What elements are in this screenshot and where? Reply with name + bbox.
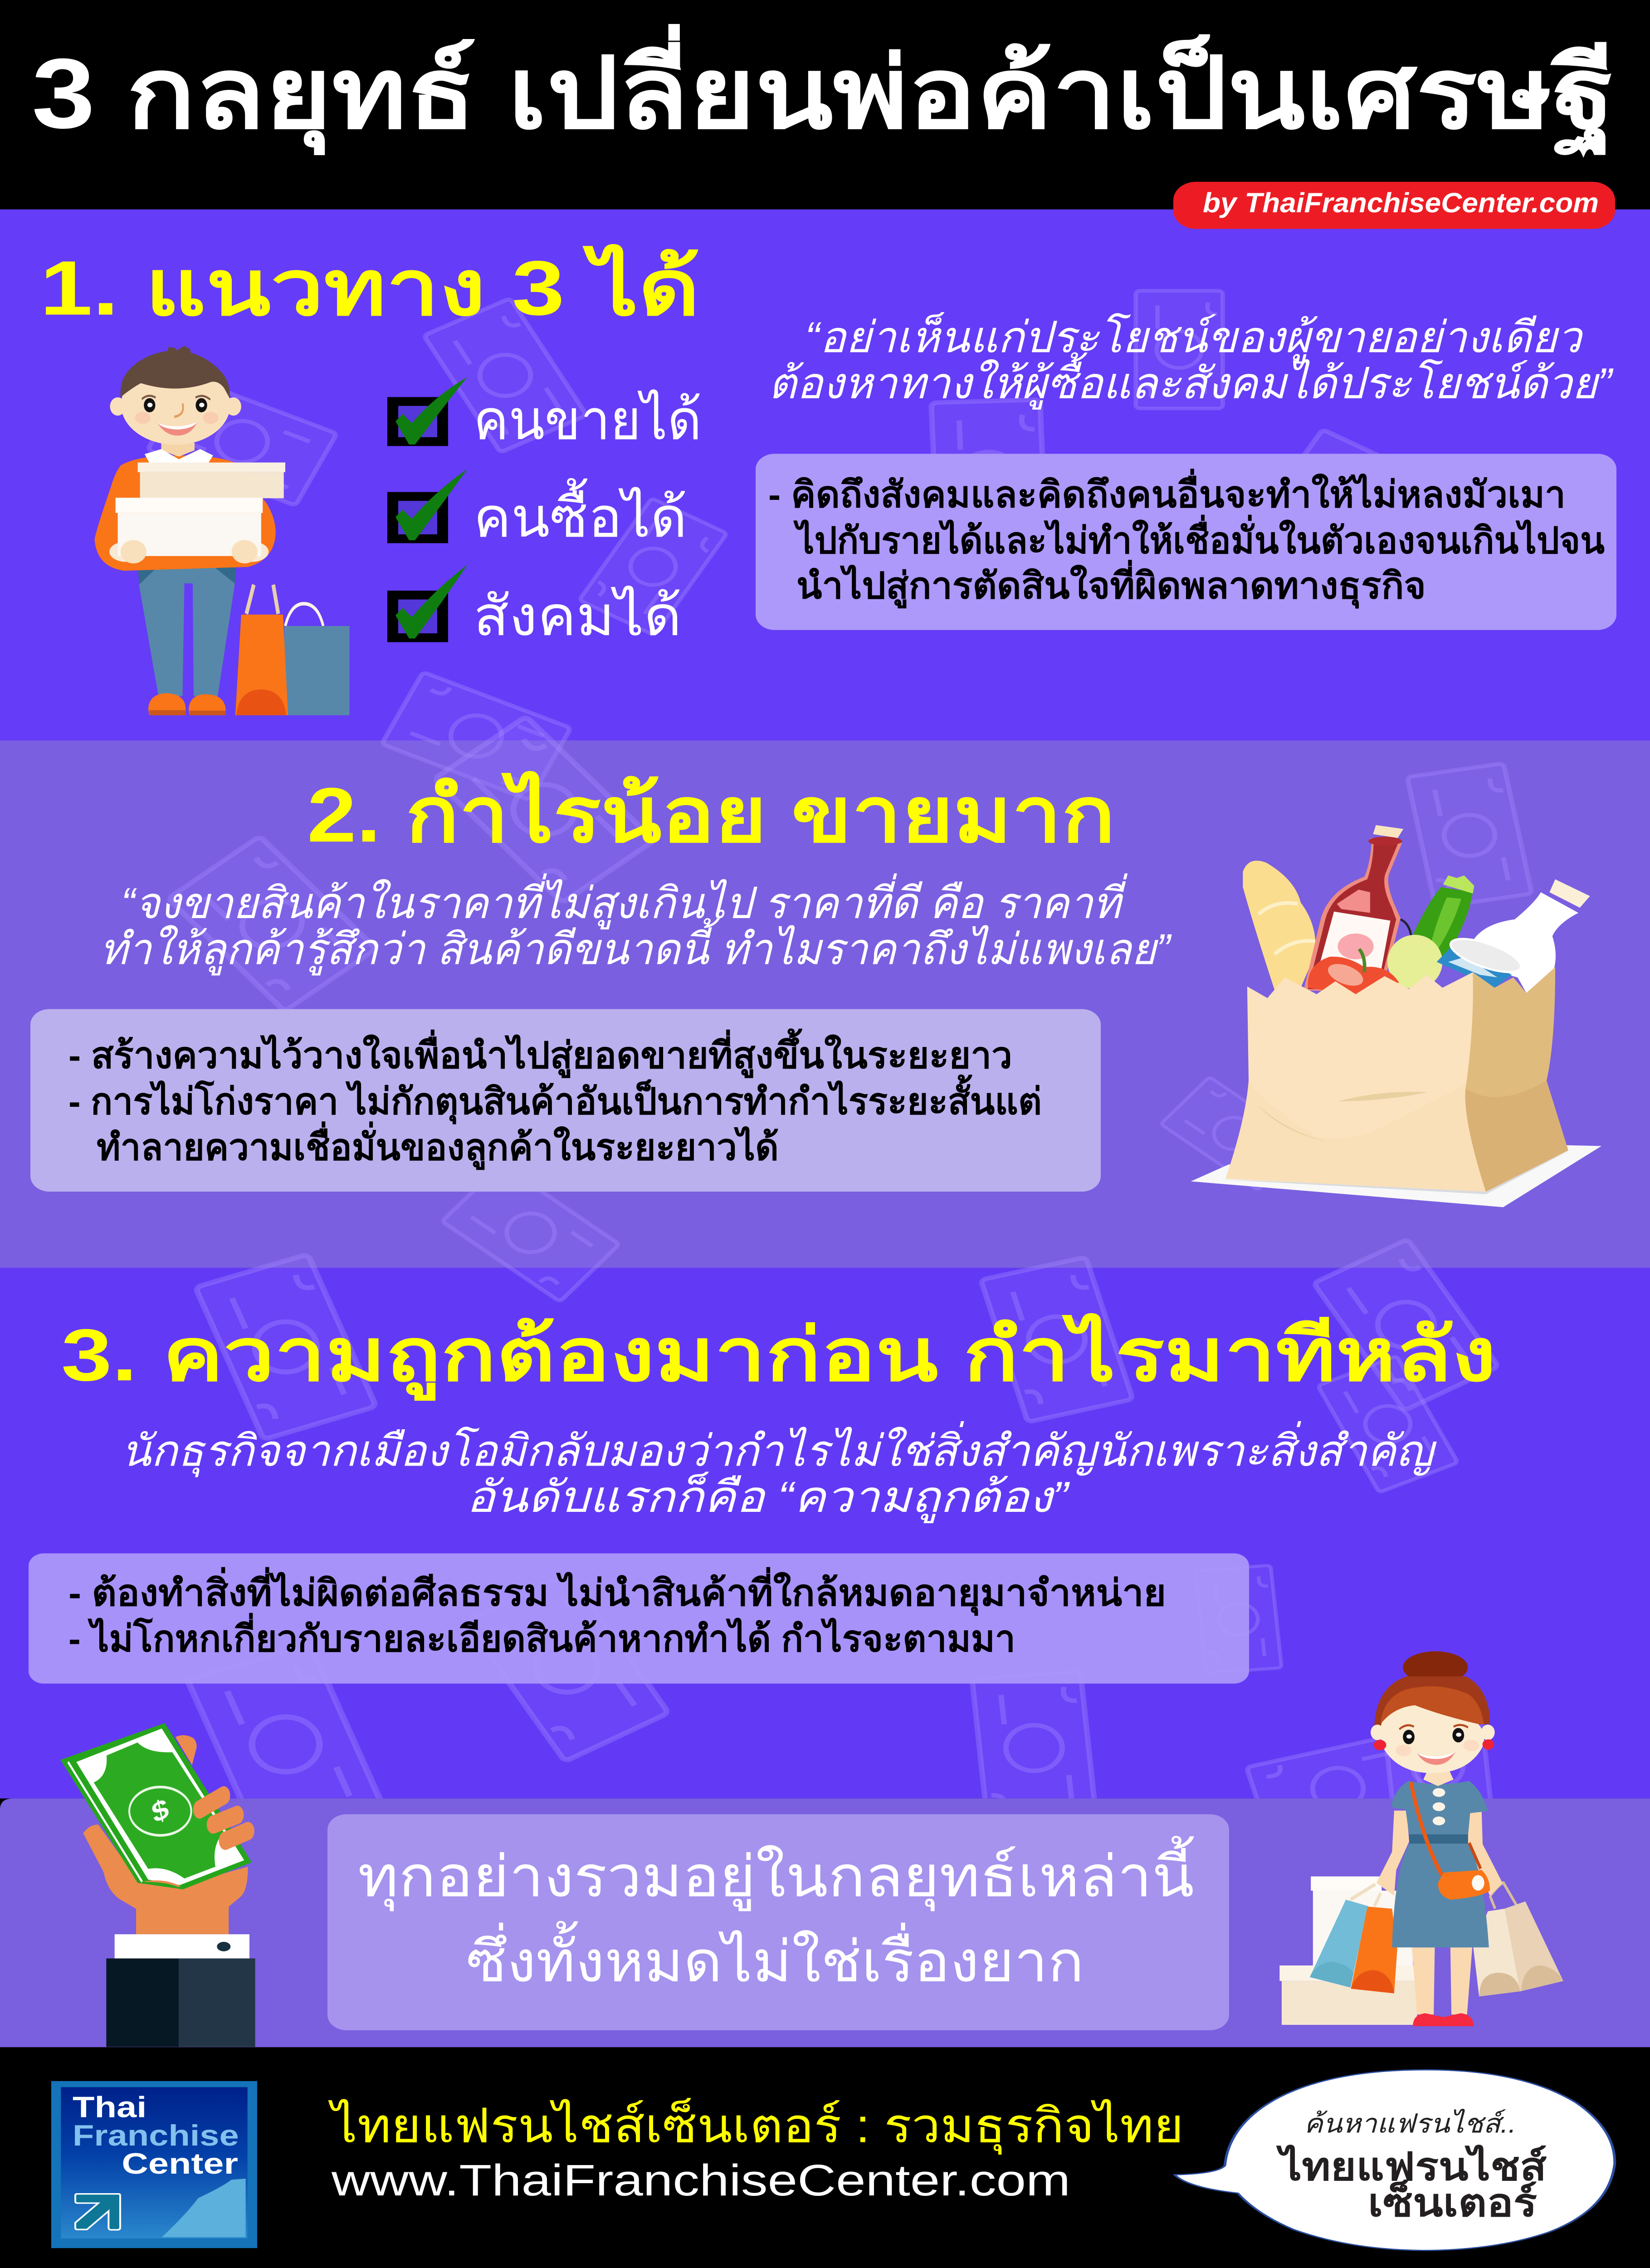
heading: section 1: 1. แนวทาง 3 ได้ bbox=[40, 244, 700, 331]
panel: closing message: ซึ่งทั้งหมดไม่ใช่เรื่องยาก bbox=[466, 1921, 1084, 1994]
heading: section 2: 2. กำไรน้อย ขายมาก bbox=[307, 771, 1115, 858]
check item 2: คนซื้อได้ bbox=[474, 478, 687, 548]
panel: section 3 notes: - ไม่โกหกเกี่ยวกับรายละเอียดสินค้าหากทำได้ กำไรจะตามมา bbox=[68, 1613, 1015, 1659]
check item 1 bbox=[393, 377, 702, 451]
header band bbox=[0, 0, 1650, 210]
section 1 background bbox=[0, 210, 1650, 741]
panel: section 2 notes: ทำลายความเชื่อมั่นของลูกค้าในระยะยาวได้ bbox=[97, 1122, 779, 1170]
panel: section 1 notes: นำไปสู่การตัดสินใจที่ผิดพลาดทางธุรกิจ bbox=[796, 560, 1426, 609]
footer brand line: ไทยแฟรนไชส์เซ็นเตอร์ : รวมธุรกิจไทย bbox=[328, 2098, 1184, 2155]
quote: section 3: อันดับแรกก็คือ “ความถูกต้อง” bbox=[466, 1471, 1070, 1524]
speech bubble: เซ็นเตอร์ bbox=[1368, 2180, 1537, 2224]
bottom band bbox=[0, 1799, 1650, 2053]
quote: section 1 bbox=[768, 312, 1614, 410]
checklist bbox=[393, 377, 702, 647]
speech bubble: ไทยแฟรนไชส์ bbox=[1276, 2145, 1547, 2189]
panel: section 3 notes: - ต้องทำสิ่งที่ไม่ผิดต่อศีลธรรม ไม่นำสินค้าที่ใกล้หมดอายุมาจำหน่าย bbox=[68, 1567, 1166, 1616]
check item 2 bbox=[393, 469, 687, 548]
illustration: hand holding money: $ bbox=[149, 1792, 171, 1829]
illustration: boy with boxes bbox=[95, 346, 350, 715]
footer brand line bbox=[328, 2098, 1184, 2205]
quote: section 2 bbox=[100, 873, 1172, 976]
logo: Thai Franchise Center: Thai bbox=[73, 2091, 146, 2124]
logo: Thai Franchise Center: Franchise bbox=[73, 2119, 239, 2152]
panel: section 1 notes bbox=[756, 454, 1616, 630]
heading: section 3: 3. ความถูกต้องมาก่อน กำไรมาทีหลัง bbox=[61, 1313, 1496, 1401]
panel: section 2 notes: - สร้างความไว้วางใจเพื่อนำไปสู่ยอดขายที่สูงขึ้นในระยะยาว bbox=[68, 1028, 1012, 1079]
illustration: hand holding money bbox=[60, 1723, 255, 2047]
byline badge bbox=[1173, 182, 1615, 229]
quote: section 3 bbox=[121, 1421, 1437, 1524]
panel: closing message: ทุกอย่างรวมอยู่ในกลยุทธ์เหล่านี้ bbox=[358, 1836, 1194, 1911]
speech bubble bbox=[1175, 2070, 1615, 2250]
speech bubble: ค้นหาแฟรนไชส์.. bbox=[1304, 2109, 1516, 2138]
quote: section 2: “จงขายสินค้าในราคาที่ไม่สูงเกินไป ราคาที่ดี คือ ราคาที่ bbox=[121, 873, 1128, 930]
section 3 background bbox=[0, 1268, 1650, 1799]
check item 3 bbox=[393, 565, 682, 647]
panel: section 3 notes bbox=[29, 1553, 1249, 1684]
panel: section 2 notes bbox=[30, 1009, 1101, 1192]
illustration: woman with shopping bags bbox=[1279, 1651, 1563, 2026]
quote: section 2: ทำให้ลูกค้ารู้สึกว่า สินค้าดีขนาดนี้ ทำไมราคาถึงไม่แพงเลย” bbox=[100, 918, 1172, 976]
check item 3: สังคมได้ bbox=[474, 585, 682, 647]
footer brand line: www.ThaiFranchiseCenter.com bbox=[331, 2156, 1070, 2205]
logo: Thai Franchise Center bbox=[51, 2081, 257, 2248]
logo: Thai Franchise Center: Center bbox=[122, 2147, 238, 2180]
illustration: grocery bag bbox=[1191, 825, 1601, 1207]
section 2 background bbox=[0, 740, 1650, 1268]
footer band bbox=[0, 2047, 1650, 2268]
check item 1: คนขายได้ bbox=[474, 389, 702, 451]
panel: closing message bbox=[327, 1814, 1229, 2030]
panel: section 2 notes: - การไม่โก่งราคา ไม่กักตุนสินค้าอันเป็นการทำกำไรระยะสั้นแต่ bbox=[68, 1074, 1042, 1124]
